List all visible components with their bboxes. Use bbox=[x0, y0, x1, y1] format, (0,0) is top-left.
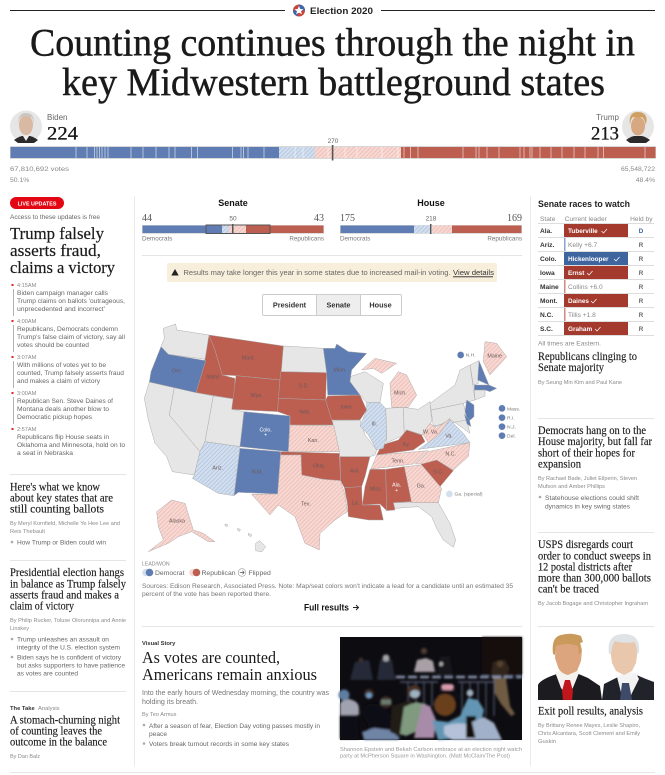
story: House majority: dynamics in key swing states bbox=[545, 503, 631, 510]
panel: Senate balance: Democrats bbox=[142, 236, 172, 242]
story: key states: Reis Thebault bbox=[10, 529, 45, 535]
story: key states: about key states that are bbox=[10, 492, 113, 504]
story: House majority: By Rachael Bade, Juliet Eilperin, Steven bbox=[538, 476, 637, 482]
state labels: Minn. bbox=[333, 368, 347, 374]
tabs: President, Senate, House: President bbox=[273, 300, 307, 310]
panel: House balance: Democrats bbox=[340, 236, 370, 242]
state labels bbox=[169, 354, 502, 525]
story: House majority: expansion bbox=[538, 458, 581, 470]
Senate races table: Held by bbox=[630, 216, 653, 223]
state labels: Tenn. bbox=[391, 459, 405, 465]
photo caption: party at McPherson Square in Washington. (Matt McClain/The Post) bbox=[340, 754, 510, 760]
map legend bbox=[142, 562, 271, 577]
270 marker bbox=[328, 138, 339, 160]
panel: right column bbox=[538, 199, 654, 745]
tabs: President, Senate, House: Senate bbox=[327, 300, 350, 310]
row Ala.: Tuberville bbox=[568, 228, 598, 235]
live update timeline: Trump's false claim of victory, say all bbox=[17, 334, 125, 341]
notice banner: View details bbox=[453, 270, 495, 277]
map source note bbox=[142, 583, 513, 598]
row Iowa: Iowa bbox=[540, 270, 555, 277]
story bullets: Voters break turnout records in some key states bbox=[149, 741, 290, 748]
seated crowd bbox=[340, 699, 359, 715]
state labels: Ill. bbox=[372, 421, 377, 427]
panel: House balance: 169 bbox=[507, 213, 522, 224]
row Maine: Maine bbox=[540, 284, 559, 291]
panel: House balance: 175 bbox=[340, 213, 355, 224]
story: presidential election: claim of victory bbox=[10, 600, 74, 612]
state labels: Ore. bbox=[172, 369, 182, 375]
row Iowa: Ernst bbox=[568, 270, 585, 277]
popular vote: Biden: 50.1% bbox=[10, 177, 29, 184]
map legend: Flipped bbox=[248, 570, 271, 577]
icon: Trump portrait bbox=[622, 110, 654, 143]
panel: Senate balance: 50 bbox=[229, 216, 237, 222]
story: exit poll bbox=[538, 706, 643, 745]
row Ala.: Ala. bbox=[540, 228, 552, 235]
story: Senate majority bbox=[538, 351, 637, 386]
story: House majority: short of their hopes for bbox=[538, 448, 635, 460]
title: key Midwestern battleground states bbox=[62, 60, 605, 104]
state labels: Kan. bbox=[308, 438, 319, 444]
state labels: Miss. bbox=[370, 487, 382, 493]
story: presidential election: as votes are counted bbox=[17, 671, 78, 678]
state labels: Ala. bbox=[392, 483, 401, 489]
row Mont. bbox=[540, 294, 644, 307]
story: exit poll: Guskin bbox=[538, 739, 556, 745]
story bullets: After a season of fear, Election Day voting passes mostly in bbox=[149, 723, 320, 730]
panel: visual story bbox=[142, 641, 329, 748]
panel: visual story: By Teo Armus bbox=[142, 712, 177, 718]
story bullets: peace bbox=[149, 731, 167, 738]
panel: Senate balance: 43 bbox=[314, 213, 324, 224]
live update timeline: Oklahoma and Minnesota, hold on to bbox=[17, 442, 125, 449]
popular vote: Biden: 67,810,692 votes bbox=[10, 166, 70, 173]
panel: visual story: Visual Story bbox=[142, 641, 176, 647]
state labels: Maine bbox=[487, 354, 502, 360]
story headline: As votes are counted, bbox=[142, 648, 280, 667]
story: House majority: House majority, but fall far bbox=[538, 436, 652, 448]
popular vote: Trump: 48.4% bbox=[636, 177, 655, 184]
map source note: percent of the vote has been reported there. bbox=[142, 591, 271, 598]
lead headline: claims a victory bbox=[10, 258, 115, 277]
title: Counting continues through the night in bbox=[30, 20, 635, 64]
state labels: Iowa bbox=[340, 405, 352, 411]
row S.C. bbox=[540, 322, 644, 335]
story: USPS: more than 300,000 ballots bbox=[538, 572, 651, 584]
row Mont.: Mont. bbox=[540, 298, 558, 305]
Senate races table: Senate races to watch bbox=[538, 199, 630, 209]
story: Senate majority: By Seung Min Kim and Paul Kane bbox=[538, 380, 622, 386]
row S.C.: S.C. bbox=[540, 326, 553, 333]
story: USPS: order to conduct sweeps in bbox=[538, 550, 651, 562]
icon: Biden portrait bbox=[10, 110, 42, 143]
live update timeline: unprecedented and incorrect' bbox=[17, 306, 105, 313]
story: exit poll: Exit poll results, analysis bbox=[538, 706, 643, 718]
live update timeline: 4:15AM bbox=[17, 283, 37, 289]
panel: Senate balance: Senate bbox=[218, 198, 248, 208]
story: presidential election: Trump unleashes an assault on bbox=[17, 637, 109, 644]
story bullets bbox=[143, 723, 320, 748]
electoral tally: Biden: Biden bbox=[47, 113, 67, 122]
panel: right column: All times are Eastern. bbox=[538, 342, 601, 348]
live update timeline: a seat in Nebraska bbox=[17, 450, 73, 457]
panel: House balance: Republicans bbox=[487, 236, 522, 242]
row Colo.: Hickenlooper bbox=[568, 256, 609, 263]
state labels: Ariz. bbox=[212, 466, 223, 472]
story: USPS bbox=[538, 539, 651, 607]
live update timeline: counted, Trump falsely asserts fraud bbox=[17, 370, 124, 377]
story: exit poll: Chris Alcantara, Scott Clement and Emily bbox=[538, 731, 640, 737]
live update timeline: With millions of votes yet to be bbox=[17, 362, 106, 369]
live updates badge: LIVE UPDATES bbox=[18, 201, 57, 207]
story: House majority: Mufson and Amber Phillips bbox=[538, 484, 605, 490]
story: USPS: 12 postal districts after bbox=[538, 562, 632, 574]
Senate races table: Current leader bbox=[565, 216, 608, 223]
lead headline: Trump falsely bbox=[10, 224, 104, 243]
icon: warning triangle bbox=[171, 269, 179, 276]
panel: House balance bbox=[340, 198, 522, 242]
story: House majority: Democrats hang on to the bbox=[538, 425, 646, 437]
small-state markers: R.I. bbox=[507, 415, 515, 421]
story: key states: Here's what we know bbox=[10, 482, 101, 494]
story: presidential election: but asks supporters to have patience bbox=[17, 663, 125, 670]
photo: election night watch party bbox=[338, 637, 522, 740]
state labels: La. bbox=[352, 501, 359, 507]
small-state markers: Del. bbox=[507, 433, 516, 439]
popular vote: Trump: 65,548,722 bbox=[621, 166, 655, 173]
story: the take: of counting leaves the bbox=[10, 726, 102, 738]
live update timeline: Republicans flip House seats in bbox=[17, 434, 109, 441]
story: the take: By Dan Balz bbox=[10, 754, 40, 760]
panel: Senate balance: 44 bbox=[142, 213, 152, 224]
tabs: President, Senate, House bbox=[262, 294, 402, 316]
row Iowa bbox=[540, 266, 644, 279]
full results link: Full results bbox=[304, 602, 349, 612]
story: USPS: can't be traced bbox=[538, 584, 599, 596]
notice banner: Results may take longer this year in some states due to increased mail-in voting. bbox=[184, 270, 451, 277]
row Maine: Collins +6.0 bbox=[568, 284, 603, 291]
state labels: Mont. bbox=[242, 356, 255, 362]
column dividers bbox=[134, 196, 135, 766]
row Ala. bbox=[540, 224, 644, 237]
section header: Election 2020 bbox=[10, 4, 655, 16]
live update timeline: 3:07AM bbox=[17, 355, 37, 361]
lead headline bbox=[10, 224, 115, 277]
blue states bbox=[149, 347, 206, 393]
story: presidential election: Linskey bbox=[10, 626, 29, 632]
state labels: Wyo. bbox=[251, 393, 263, 399]
live update timeline: 3:00AM bbox=[17, 391, 37, 397]
story: presidential election bbox=[10, 567, 126, 678]
Trump bbox=[538, 634, 602, 700]
map legend: LEAD/WON bbox=[142, 562, 170, 568]
barricade bbox=[396, 676, 522, 678]
panel: Senate balance bbox=[142, 198, 324, 242]
state labels: Colo. bbox=[259, 428, 272, 434]
story deck: Into the early hours of Wednesday morning, the country was bbox=[142, 688, 329, 697]
panel: House balance: 218 bbox=[426, 216, 437, 222]
state labels: Tex. bbox=[301, 502, 311, 508]
row Ariz.: R bbox=[639, 242, 644, 249]
access note: Access to these updates is free bbox=[10, 214, 101, 221]
story headline: Americans remain anxious bbox=[142, 665, 317, 684]
section header: Election 2020: Election 2020 bbox=[310, 6, 373, 16]
notice banner bbox=[167, 263, 497, 282]
story: the take: A stomach-churning night bbox=[10, 714, 121, 726]
row Ariz.: Ariz. bbox=[540, 242, 554, 249]
Biden bbox=[602, 634, 654, 700]
small-state markers: Ga. (special) bbox=[454, 492, 483, 498]
map: United States Senate results bbox=[144, 324, 520, 552]
small-state markers bbox=[446, 352, 520, 498]
red states bbox=[196, 335, 235, 399]
story: exit poll: By Brittany Renee Mayes, Leslie Shapiro, bbox=[538, 723, 640, 729]
state labels: Neb. bbox=[299, 410, 311, 416]
gray states bbox=[161, 324, 209, 359]
Senate races table: State bbox=[540, 216, 556, 223]
state labels: S.C. bbox=[433, 470, 444, 476]
row Mont.: R bbox=[639, 298, 644, 305]
electoral tally: Trump: Trump bbox=[596, 113, 620, 122]
row Ariz.: Kelly +6.7 bbox=[568, 242, 597, 249]
live update timeline bbox=[12, 283, 125, 457]
story: the take: The Take bbox=[10, 706, 35, 712]
live update timeline: Montana deals another blow to bbox=[17, 406, 109, 413]
background crowd bbox=[350, 660, 395, 680]
live update timeline: Trump claims on ballots 'outrageous, bbox=[17, 298, 125, 305]
story: key states bbox=[10, 482, 120, 547]
270 marker: 270 bbox=[328, 138, 339, 145]
Senate races table bbox=[538, 199, 654, 336]
row Colo.: Colo. bbox=[540, 256, 557, 263]
state labels: Mich. bbox=[394, 391, 407, 397]
title bbox=[30, 20, 635, 104]
row S.C.: R bbox=[639, 326, 644, 333]
small-state markers: N.J. bbox=[507, 424, 516, 430]
row Iowa: R bbox=[639, 270, 644, 277]
popular vote: Biden bbox=[10, 166, 70, 184]
lead headline: asserts fraud, bbox=[10, 241, 101, 260]
panel: Senate balance: Republicans bbox=[289, 236, 324, 242]
electoral tally: Biden: 224 bbox=[47, 124, 79, 144]
row S.C.: Graham bbox=[568, 326, 592, 333]
story: the take bbox=[10, 706, 121, 760]
row Ariz. bbox=[540, 238, 644, 251]
light red states bbox=[288, 425, 339, 452]
story: presidential election: in balance as Trump falsely bbox=[10, 578, 126, 590]
row Colo. bbox=[540, 252, 644, 265]
row Ala.: D bbox=[639, 228, 644, 235]
row Mont.: Daines bbox=[568, 298, 589, 305]
story: key states: still counting ballots bbox=[10, 504, 105, 516]
small-state markers: N.H. bbox=[466, 353, 476, 359]
story deck: holding its breath. bbox=[142, 697, 198, 706]
story: presidential election: asserts fraud and makes a bbox=[10, 590, 119, 602]
live update timeline: Democratic pickup hopes bbox=[17, 414, 93, 421]
live update timeline: 2:57AM bbox=[17, 427, 37, 433]
story: the take: outcome in the balance bbox=[10, 736, 107, 748]
illustration: Trump and Biden bbox=[538, 634, 654, 700]
state labels: Okla. bbox=[313, 464, 325, 470]
live update timeline: votes should be counted bbox=[17, 342, 89, 349]
tabs: President, Senate, House: House bbox=[369, 300, 392, 310]
state labels: Ky. bbox=[403, 442, 410, 448]
row Colo.: R bbox=[639, 256, 644, 263]
map legend: Republican bbox=[202, 570, 236, 577]
electoral tally: Trump bbox=[591, 110, 654, 144]
electoral tally: Trump: 213 bbox=[591, 124, 619, 144]
live update timeline: 4:00AM bbox=[17, 319, 37, 325]
state labels: Ark. bbox=[350, 469, 360, 475]
panel: House balance: House bbox=[417, 198, 445, 208]
story: Senate majority: Senate majority bbox=[538, 362, 604, 374]
live update timeline: and makes a claim of victory bbox=[17, 378, 101, 385]
state labels: S.D. bbox=[298, 384, 309, 390]
small-state markers: Mass. bbox=[507, 406, 520, 412]
state labels: Alaska bbox=[169, 519, 185, 525]
state labels: Va. bbox=[445, 434, 453, 440]
story: USPS: USPS disregards court bbox=[538, 539, 634, 551]
map source note: Sources: Edison Research, Associated Press. Note: Map/seat colors won't indicate a lead for a candidate until an estimated 35 bbox=[142, 583, 513, 590]
row Maine bbox=[540, 280, 644, 293]
state labels: + bbox=[264, 433, 267, 439]
row N.C.: R bbox=[639, 312, 644, 319]
state labels: W. Va. bbox=[423, 429, 438, 435]
state labels: Idaho bbox=[206, 375, 220, 381]
story: presidential election: Biden says he is confident of victory bbox=[17, 655, 122, 662]
live updates badge bbox=[10, 197, 64, 209]
story headline bbox=[142, 648, 317, 684]
live update timeline: Republican Sen. Steve Daines of bbox=[17, 398, 113, 405]
story: key states: By Meryl Kornfield, Michelle Ye Hee Lee and bbox=[10, 521, 120, 527]
story: House majority: Statehouse elections could shift bbox=[545, 495, 639, 502]
icon: election star bbox=[293, 4, 305, 16]
state labels: N.M. bbox=[252, 470, 263, 476]
row N.C.: Tillis +1.8 bbox=[568, 312, 596, 319]
story: presidential election: Presidential election hangs bbox=[10, 567, 124, 579]
row N.C. bbox=[540, 308, 644, 321]
row N.C.: N.C. bbox=[540, 312, 553, 319]
story: key states: How Trump or Biden could win bbox=[17, 540, 106, 547]
electoral tally: Biden bbox=[10, 110, 79, 144]
photo caption bbox=[340, 747, 522, 760]
story deck bbox=[142, 688, 329, 706]
state labels: + bbox=[395, 488, 398, 494]
light blue states bbox=[192, 442, 240, 496]
story: USPS: By Jacob Bogage and Christopher Ingraham bbox=[538, 601, 648, 607]
state labels: N.C. bbox=[445, 452, 456, 458]
story: presidential election: integrity of the U.S. election system bbox=[17, 645, 120, 652]
map legend: Democrat bbox=[155, 570, 185, 577]
story: the take: Analysis bbox=[38, 706, 60, 712]
popular vote: Trump bbox=[621, 166, 655, 184]
live update timeline: Republicans, Democrats condemn bbox=[17, 326, 118, 333]
story: Senate majority: Republicans clinging to bbox=[538, 351, 637, 363]
panel: left column bbox=[10, 197, 126, 760]
story: presidential election: By Philip Rucker, Toluse Olorunnipa and Annie bbox=[10, 618, 126, 624]
state labels: Ga. bbox=[417, 484, 425, 490]
row Maine: R bbox=[639, 284, 644, 291]
story: House majority bbox=[538, 425, 652, 510]
photo caption: Shannon Epstein and Bekah Carlson embrace at an election night watch bbox=[340, 747, 522, 753]
live update timeline: Biden campaign manager calls bbox=[17, 290, 109, 297]
electoral vote bar bbox=[10, 138, 656, 160]
